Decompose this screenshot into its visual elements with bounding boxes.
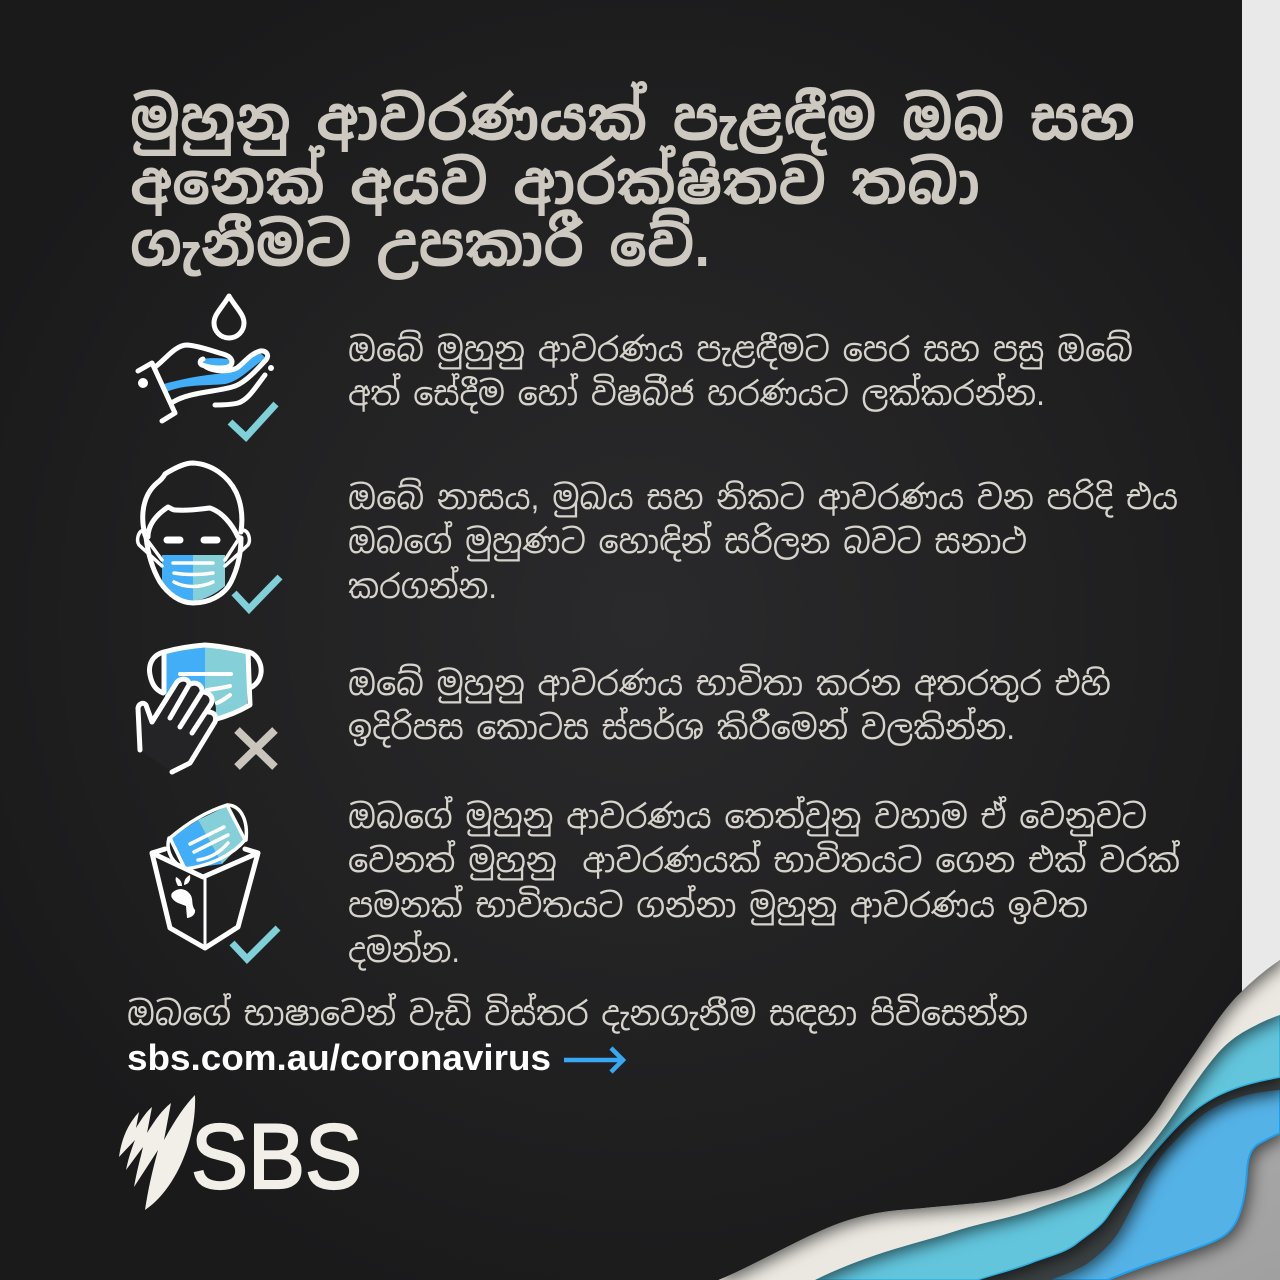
step 1 text: අත් සේදීම හෝ විෂබීජ හරණයට ලක්කරන්න. xyxy=(348,372,1045,414)
footer text: ඔබගේ භාෂාවෙන් වැඩි විස්තර දැනගැනීම සඳහා පිවිසෙන්න xyxy=(127,992,1028,1034)
step 1 text: ඔබේ මුහුනු ආවරණය පැළඳීමට පෙර සහ පසු ඔබේ xyxy=(348,329,1133,370)
step 3 text: ඔබේ මුහුනු ආවරණය භාවිතා කරන අතරතුර එහි xyxy=(348,663,1111,704)
arrow xyxy=(564,1048,623,1072)
step 4 text: පමනක් භාවිතයට ගන්නා මුහුනු ආවරණය ඉවත xyxy=(348,884,1088,926)
title: මුහුනු ආවරණයක් පැළඳීම ඔබ සහ xyxy=(130,81,1135,156)
title: අනෙක් අයව ආරක්ෂිතව තබා xyxy=(130,145,980,217)
step 4 text: ඔබගේ මුහුනු ආවරණය තෙත්වුනු වහාම ඒ වෙනුවට xyxy=(348,795,1147,837)
title: ගැනීමට උපකාරී වේ. xyxy=(130,207,710,280)
SBS logo xyxy=(119,1095,362,1210)
step 2 text xyxy=(348,477,1178,605)
icon: hand touching mask with cross xyxy=(138,645,275,772)
website link: sbs.com.au/coronavirus xyxy=(127,1037,551,1078)
icon: mask in bin xyxy=(152,805,278,959)
step 3 text xyxy=(348,663,1111,748)
icon: hand washing with water drop xyxy=(138,296,276,437)
background panel and side strip xyxy=(340,0,1280,1280)
step 2 text: ඔබගේ මුහුණට හොඳින් සරිලන බවට සනාථ xyxy=(348,520,1027,562)
step 2 text: කරගන්න. xyxy=(348,565,497,605)
step 3 text: ඉදිරිපස කොටස ස්පර්ශ කිරීමෙන් වලකින්න. xyxy=(348,706,1015,748)
title xyxy=(130,81,1135,280)
SBS logo: SBS xyxy=(191,1106,362,1208)
step 4 text: වෙනත් මුහුනු ආවරණයක් භාවිතයට ගෙන එක් වරක් xyxy=(348,839,1181,881)
step 4 text: දමන්න. xyxy=(348,929,460,971)
step 1 text xyxy=(348,329,1133,414)
step 4 text xyxy=(348,795,1181,971)
icon: face wearing mask xyxy=(138,463,280,609)
decorative bottom-right waves xyxy=(700,900,1280,1280)
step 2 text: ඔබේ නාසය, මුඛය සහ නිකට ආවරණය වන පරිදි එය xyxy=(348,477,1178,518)
